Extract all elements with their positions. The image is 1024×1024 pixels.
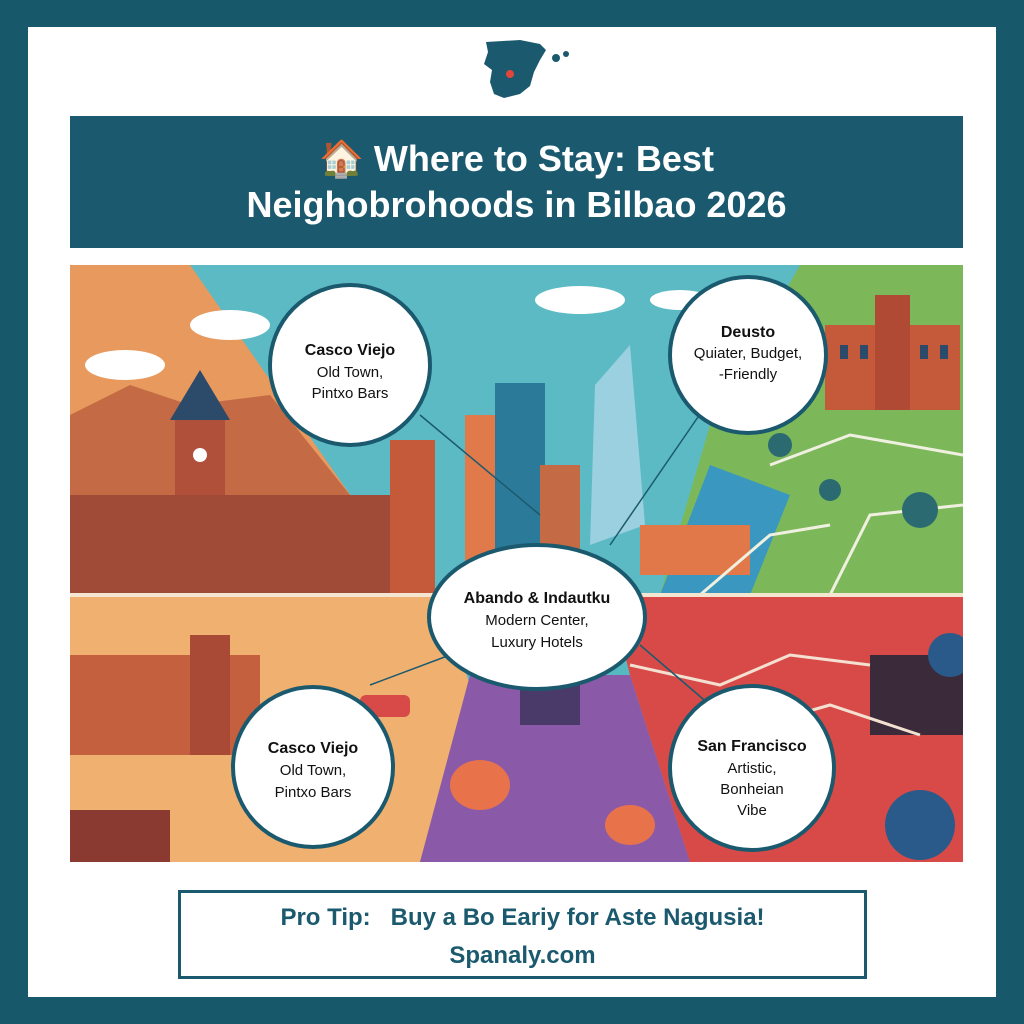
callout: casco viejo top: Casco Viejo xyxy=(305,342,395,359)
callout: san francisco xyxy=(670,686,834,850)
callout: casco viejo top: Pintxo Bars xyxy=(312,385,388,402)
callout: abando: Luxury Hotels xyxy=(491,634,583,651)
title: Neighobrohoods in Bilbao 2026 xyxy=(246,184,787,225)
title xyxy=(70,116,963,248)
callout: deusto: -Friendly xyxy=(719,366,778,383)
callout: deusto: Quiater, Budget, xyxy=(694,345,802,362)
callout: abando: Modern Center, xyxy=(485,612,589,629)
callout: san francisco: Vibe xyxy=(737,802,767,819)
callout: casco viejo bottom: Pintxo Bars xyxy=(275,784,351,801)
callout: casco viejo bottom: Casco Viejo xyxy=(268,740,358,757)
callout: abando: Abando & Indautku xyxy=(464,590,610,607)
callout: casco viejo bottom xyxy=(233,687,393,847)
callout: casco viejo bottom: Old Town, xyxy=(280,762,346,779)
callout: casco viejo top: Old Town, xyxy=(317,364,383,381)
callout: deusto: Deusto xyxy=(721,324,775,341)
icon: spain map xyxy=(484,40,569,98)
callout: san francisco: San Francisco xyxy=(697,738,807,755)
title: 🏠 Where to Stay: Best xyxy=(319,138,714,179)
pro tip box: Spanaly.com xyxy=(449,942,596,969)
callout: abando xyxy=(429,545,645,689)
church tower xyxy=(175,415,225,585)
pro tip box: Pro Tip: Buy a Bo Eariy for Aste Nagusia! xyxy=(280,904,765,931)
callout: san francisco: Artistic, xyxy=(727,760,777,777)
callout: deusto xyxy=(670,277,826,433)
callout: san francisco: Bonheian xyxy=(720,781,784,798)
illustration map xyxy=(70,265,963,862)
pro tip box xyxy=(178,890,867,979)
callout: casco viejo top xyxy=(270,285,430,445)
